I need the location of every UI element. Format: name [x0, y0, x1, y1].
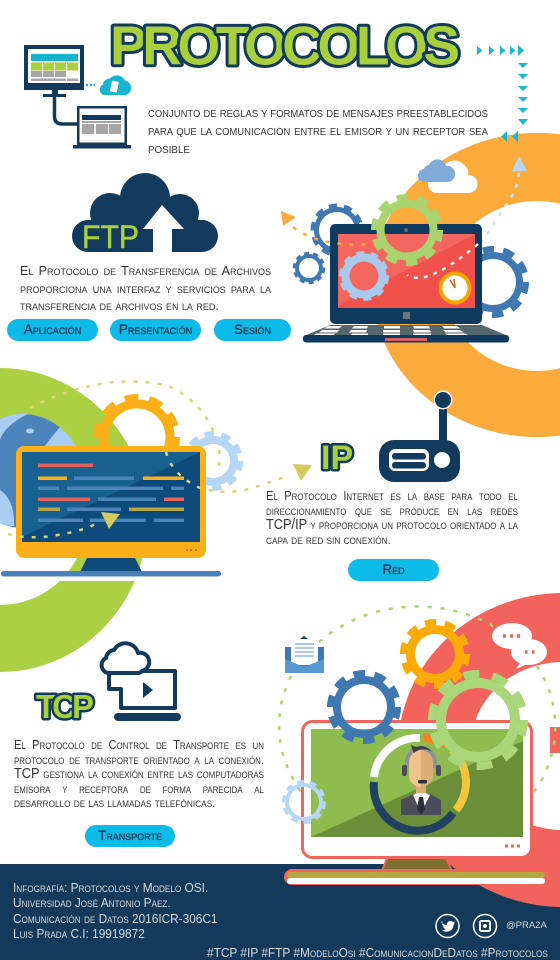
- clock: [438, 272, 472, 304]
- icon: FTP cloud with upload arrow: [72, 173, 218, 255]
- dashed path to IP: [166, 452, 288, 492]
- IP description: TCP/IP y proporciona un protocolo orientado a la: [266, 517, 518, 533]
- IP description: capa de red sin conexión.: [266, 533, 391, 547]
- icon: speech bubbles: [492, 623, 547, 669]
- orange ring: [372, 133, 560, 437]
- dashed arc: [30, 382, 220, 473]
- white gap under base: [0, 576, 175, 581]
- FTP description: [20, 264, 271, 313]
- pill: Sesión: Sesión: [234, 322, 271, 337]
- IP description: direccionamiento que se produce en las redes: [266, 504, 518, 518]
- TCP label: TCP: [36, 688, 94, 725]
- gear: light blue on screen: [341, 253, 387, 299]
- pill: Red: Red: [382, 562, 405, 577]
- green dashed arcs: [279, 607, 555, 796]
- intro text: [148, 109, 488, 156]
- support scene: [279, 607, 555, 885]
- white and blue clouds: [418, 159, 478, 193]
- pill: Presentación: Presentación: [119, 322, 192, 337]
- pill: Red: [348, 559, 439, 581]
- IP description: El Protocolo Internet es la base para todo el: [266, 489, 518, 503]
- hashtags: #TCP #IP #FTP #ModeloOsi #ComunicacionDeDatos #Protocolos: [207, 945, 548, 960]
- globe: [0, 414, 80, 528]
- icon: desktop and laptop network: [24, 45, 131, 148]
- agent: [401, 745, 441, 815]
- intro text: PARA QUE LA COMUNICACIÓN ENTRE EL EMISOR Y UN RECEPTOR SEA: [148, 127, 488, 138]
- arrow: olive pointing to IP: [293, 464, 312, 481]
- IP label: IP: [321, 439, 353, 477]
- gear: blue right: [460, 249, 526, 315]
- monitor dots: [505, 844, 520, 848]
- gear: light blue: [284, 782, 324, 822]
- intro text: CONJUNTO DE REGLAS Y FORMATOS DE MENSAJES PREESTABLECIDOS: [148, 109, 488, 120]
- TCP description: emisora y receptora de forma parecida al: [14, 782, 264, 796]
- TCP description: El Protocolo de Control de Transporte es un: [14, 738, 264, 752]
- gear: large green: [374, 197, 440, 263]
- gear: blue upper left: [312, 206, 362, 254]
- dashed path lower: [8, 524, 95, 537]
- gear: large green: [432, 674, 524, 766]
- trackpad strip: [385, 338, 427, 341]
- monitor screen: [22, 452, 200, 542]
- arrows: teal chevrons: [477, 45, 528, 142]
- monitor frame: [302, 722, 532, 858]
- gear: blue: [330, 674, 398, 740]
- gear: orange: [404, 622, 466, 686]
- dashed path to top arrow: [478, 173, 519, 244]
- IP description: [266, 489, 518, 547]
- footer credits: Universidad José Antonio Paez.: [13, 895, 171, 910]
- laptop button: [403, 312, 410, 319]
- intro text: POSIBLE: [148, 145, 190, 156]
- orange dashed path: [293, 227, 376, 244]
- pill: Presentación: [110, 319, 201, 341]
- FTP description: El Protocolo de Transferencia de Archivos: [20, 264, 271, 278]
- monitor base: [284, 869, 548, 885]
- footer credits: Infografía: Protocolos y Modelo OSI.: [13, 880, 208, 895]
- green ring: [0, 368, 147, 672]
- monitor bezel: [16, 446, 206, 558]
- arrow: light blue: [512, 156, 527, 171]
- footer band: [0, 864, 560, 960]
- laptop lid: [330, 224, 482, 324]
- pill: Aplicación: Aplicación: [24, 322, 81, 337]
- footer credits: Luis Prada C.I: 19919872: [13, 926, 145, 941]
- footer credits: Comunicación de Datos 2016ICR-306C1: [13, 911, 218, 926]
- icon: envelope: [285, 636, 324, 673]
- monitor scene with globe and gears: [0, 382, 288, 581]
- laptop base: [303, 335, 509, 342]
- footer credits: [13, 880, 218, 941]
- red ring: [398, 593, 560, 907]
- icon: TCP cloud and laptop: [102, 643, 181, 721]
- bezel dots: [186, 549, 197, 551]
- icon: twitter: [436, 914, 459, 938]
- pill: Transporte: Transporte: [98, 828, 162, 843]
- connecting cable: [54, 97, 78, 124]
- title: PROTOCOLOS: [110, 14, 460, 76]
- pill: Sesión: [214, 319, 291, 341]
- gear: orange: [97, 397, 177, 477]
- icon: instagram: [474, 914, 496, 938]
- laptop: [73, 106, 131, 148]
- laptop scene with gears: [281, 156, 527, 342]
- white dashed path on screen: [407, 244, 478, 278]
- progress ring: [374, 738, 466, 831]
- arrow: olive triangle: [101, 512, 120, 529]
- pill: Aplicación: [7, 319, 98, 341]
- laptop screen: [338, 234, 475, 308]
- monitor: [24, 45, 84, 97]
- TCP description: [14, 738, 264, 810]
- arrow: orange: [281, 211, 296, 226]
- social handle: @PRA2A: [506, 920, 547, 931]
- monitor screen: [311, 729, 523, 837]
- TCP description: desarrollo de las llamadas telefónicas.: [14, 796, 215, 810]
- gear: small blue: [294, 253, 324, 283]
- cloud with phone: [86, 75, 131, 95]
- FTP label: FTP: [82, 219, 139, 255]
- code lines: [38, 464, 184, 522]
- pill: Transporte: [85, 825, 175, 847]
- keyboard: [304, 325, 508, 336]
- monitor base: [1, 571, 221, 576]
- monitor stand: [80, 558, 142, 572]
- gear: light blue: [186, 434, 240, 488]
- TCP description: TCP gestiona la conexión entre las computadoras: [14, 766, 264, 782]
- monitor stand: [381, 856, 453, 873]
- FTP description: proporciona una interfaz y servicios para la: [20, 282, 271, 296]
- FTP description: transferencia de archivos en la red.: [20, 299, 219, 313]
- TCP description: protocolo de transporte orientado a la conexión.: [14, 753, 264, 767]
- webcam: [404, 228, 408, 232]
- icon: router: [379, 390, 460, 482]
